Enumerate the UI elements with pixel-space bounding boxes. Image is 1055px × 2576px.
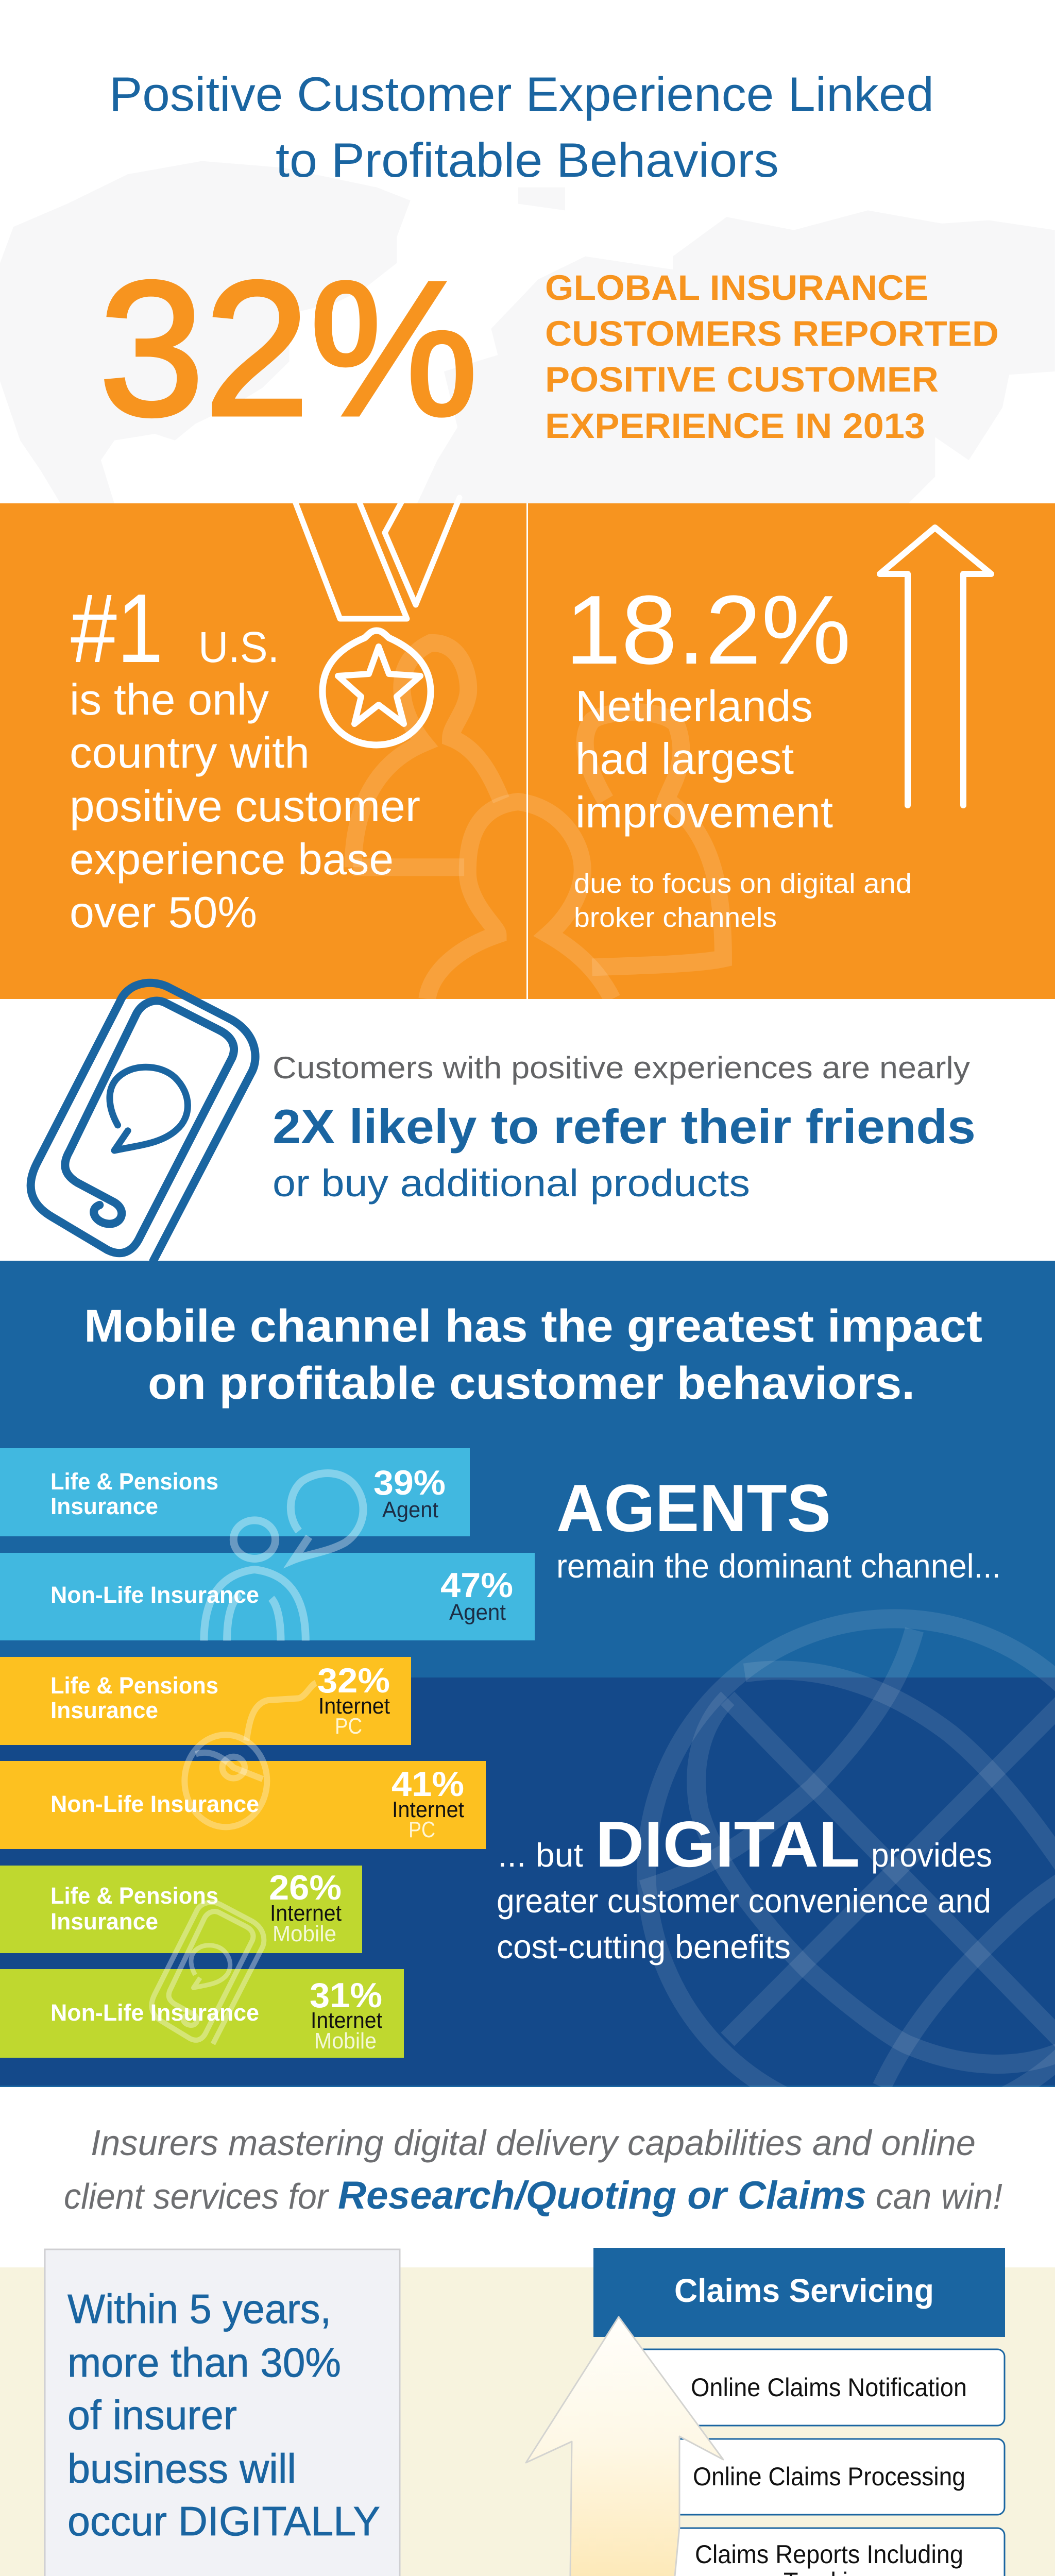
stat: #1 U.S.: country with [70,728,310,777]
bar 3 labels: Internet [318,1693,390,1719]
text: claims step labels: Online Claims Processing [693,2462,965,2491]
icon: ghost phone [151,1902,264,2044]
text: digital: cost-cutting benefits [497,1928,791,1965]
statistic description [545,268,999,446]
title [109,67,934,187]
stat: 18.2% Netherlands: broker channels [574,902,777,933]
bar 2 labels [50,1566,513,1625]
heading: mobile channel: on profitable customer behaviors. [148,1357,915,1409]
box: claims servicing [593,2248,1005,2337]
bar 5 labels [50,1868,342,1946]
bar chart: channel impact [0,1448,535,2058]
bar 3 labels: Life & Pensions [50,1672,218,1699]
text: digital: DIGITAL [595,1808,860,1880]
bar 4 labels: 41% [392,1765,464,1804]
callout: within 5 years: Within 5 years, [67,2286,331,2332]
bar 2 labels: Agent [449,1600,506,1625]
bar 1 labels: 39% [373,1463,446,1502]
bar 4 labels [50,1765,464,1842]
bar 5 labels: Insurance [50,1908,158,1935]
text: insurers statement [64,2123,1002,2217]
bar 5 labels: 26% [269,1868,342,1907]
bar 6 labels [50,1976,382,2054]
title: Positive Customer Experience Linked [109,67,934,121]
icon: up arrow [880,528,991,805]
icon: ghost globe [642,1619,1055,2122]
text: claims step labels: Claims Reports Including [695,2540,963,2569]
title: to Profitable Behaviors [276,133,779,187]
bar 1 labels [50,1463,446,1522]
callout: within 5 years [45,2249,400,2576]
stat: #1 U.S.: is the only [70,675,269,724]
bar 3 labels [50,1661,390,1739]
icon: medal [294,498,460,745]
statistic description: GLOBAL INSURANCE [545,268,928,308]
bar 3 labels: PC [335,1714,362,1739]
bar 1 labels: Agent [382,1497,438,1522]
panel: blue channel section [0,1261,1055,2087]
text: claims step labels [691,2373,967,2576]
icon: ghost mouse [184,1683,316,1827]
bar 1 labels: Insurance [50,1493,158,1519]
bar 6 labels: Non-Life Insurance [50,1999,259,2026]
statistic description: CUSTOMERS REPORTED [545,314,999,353]
panel: cream digital capabilities [0,2267,1055,2576]
stat: 18.2% Netherlands: 18.2% [565,575,851,685]
stat: #1 U.S. [70,574,420,937]
bar 6 labels: 31% [310,1976,382,2015]
bar 5 labels: Internet [270,1901,342,1926]
claims steps boxes [595,2349,1005,2576]
text: insurers statement: Insurers mastering digital delivery capabilities and online [91,2123,976,2163]
text: refer friends statement: 2X likely to refer their friends [273,1099,976,1154]
stat: #1 U.S.: #1 [71,574,163,683]
stat: 18.2% Netherlands: due to focus on digital and [574,868,912,899]
stat: 18.2% Netherlands: improvement [575,788,833,837]
bar 6 labels: Mobile [314,2028,377,2054]
text: insurers statement: Research/Quoting or Claims [338,2174,866,2217]
icon: ghost agent [204,1473,363,1640]
bar 4 labels: Non-Life Insurance [50,1791,259,1817]
stat: #1 U.S.: U.S. [198,623,279,671]
ghost people illustration [353,643,723,999]
stat: #1 U.S.: over 50% [70,888,257,937]
callout: within 5 years: occur DIGITALLY [67,2498,380,2544]
callout: within 5 years: business will [67,2446,296,2492]
bar 3 labels: Insurance [50,1697,158,1723]
text: digital [497,1808,992,1965]
text: digital: greater customer convenience and [497,1882,991,1920]
text: refer friends statement [273,1050,976,1205]
text: digital: provides [871,1836,992,1874]
heading: mobile channel [84,1300,982,1409]
arrow: swoosh ribbon [192,2317,723,2576]
big statistic: 32%: 32% [99,241,478,455]
stat: #1 U.S.: positive customer [70,782,420,831]
bar 2 labels: 47% [440,1566,513,1605]
bar 1 labels: Life & Pensions [50,1468,218,1495]
bar 2 labels: Non-Life Insurance [50,1582,259,1608]
text: refer friends statement: or buy additional products [273,1162,750,1205]
text: insurers statement: can win! [876,2176,1002,2216]
bar 4 labels: Internet [392,1797,464,1822]
text: digital: ... but [498,1836,583,1874]
statistic description: EXPERIENCE IN 2013 [545,406,925,446]
text: agents [556,1470,1001,1585]
text: agents: remain the dominant channel... [556,1547,1001,1585]
panel: orange statistics band [0,503,1055,999]
text: claims step labels: Online Claims Notification [691,2373,967,2402]
text: agents: AGENTS [556,1470,831,1546]
icon: mobile phone with chat bubble [31,983,256,1261]
bar 3 labels: 32% [317,1661,390,1700]
callout: within 5 years: more than 30% [67,2340,341,2385]
stat: 18.2% Netherlands: Netherlands [575,682,813,731]
bar 5 labels: Life & Pensions [50,1883,218,1909]
background: faint world map [0,161,1055,503]
stat: 18.2% Netherlands [565,575,912,933]
bar 4 labels: PC [409,1817,435,1842]
callout: within 5 years: of insurer [67,2392,237,2438]
text: refer friends statement: Customers with positive experiences are nearly [273,1050,970,1085]
bar 5 labels: Mobile [273,1921,336,1946]
bar 6 labels: Internet [311,2008,382,2033]
stat: #1 U.S.: experience base [70,835,394,884]
statistic description: POSITIVE CUSTOMER [545,360,939,399]
heading: mobile channel: Mobile channel has the greatest impact [84,1300,982,1351]
text: insurers statement: client services for [64,2176,330,2216]
box: claims servicing: Claims Servicing [674,2272,934,2309]
stat: 18.2% Netherlands: had largest [575,735,794,784]
